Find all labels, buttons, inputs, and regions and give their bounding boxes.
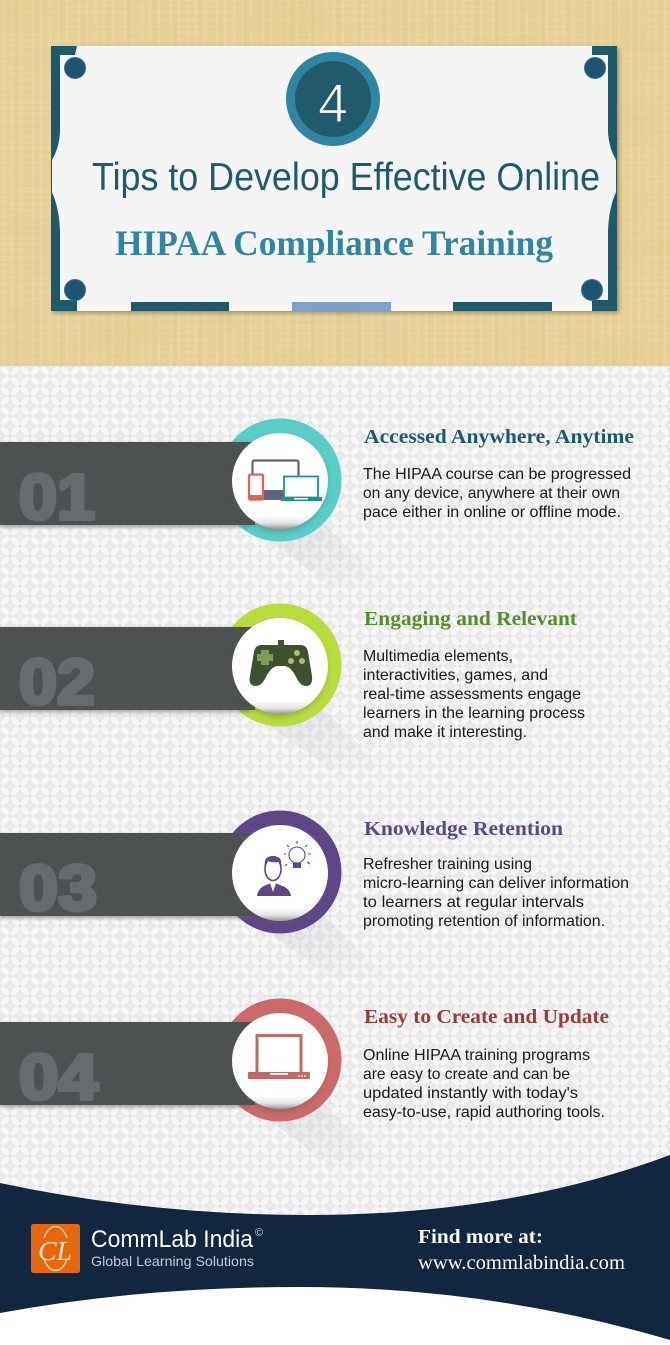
tagline: Global Learning Solutions — [91, 1253, 254, 1269]
card frame — [51, 46, 617, 311]
icon: laptop — [248, 1036, 310, 1079]
card shadow — [53, 48, 619, 313]
website: www.commlabindia.com — [418, 1252, 625, 1274]
tip 2 graphic — [0, 604, 385, 770]
tip 2 body: interactivities, games, and — [363, 667, 548, 684]
tip 3 graphic — [0, 810, 385, 977]
find more label: Find more at: — [418, 1226, 543, 1248]
number badge — [286, 52, 380, 146]
tip 3 body: promoting retention of information. — [363, 913, 605, 930]
copyright mark: © — [255, 1227, 263, 1239]
tip 4 body: are easy to create and can be — [363, 1066, 570, 1083]
number 01: 01 — [19, 461, 95, 533]
tip 2 body — [363, 648, 585, 741]
tip 3 heading: Knowledge Retention — [364, 818, 563, 840]
title card — [51, 46, 619, 313]
tip 1 heading: Accessed Anywhere, Anytime — [364, 426, 634, 448]
title line 2: HIPAA Compliance Training — [115, 223, 553, 263]
number 03: 03 — [19, 852, 97, 924]
tip 2 body: real-time assessments engage — [363, 686, 581, 703]
footer curved shape — [0, 1155, 670, 1345]
tip 3 body: Refresher training using — [363, 856, 532, 873]
background: grey scale-patterned body — [0, 366, 670, 1226]
tip 1 body — [363, 466, 631, 521]
tip 3 body: to learners at regular intervals — [363, 894, 584, 911]
corner dots — [64, 58, 606, 300]
tip 4 body: updated instantly with today's — [363, 1085, 578, 1102]
number 02: 02 — [19, 646, 95, 718]
tip 4 body — [363, 1047, 605, 1121]
tip 3 body — [363, 856, 629, 930]
background: woven tan header band — [0, 0, 670, 366]
tip 4 heading: Easy to Create and Update — [364, 1006, 609, 1028]
card white panel — [52, 46, 616, 311]
tip 1 body: on any device, anywhere at their own — [363, 485, 620, 502]
tip 1 body: The HIPAA course can be progressed — [363, 466, 631, 483]
title line 1: Tips to Develop Effective Online — [92, 156, 600, 199]
logo — [31, 1224, 80, 1273]
footer band — [0, 1155, 670, 1345]
bottom bars — [131, 302, 552, 311]
icon: game controller — [250, 640, 312, 686]
tip 2 body: learners in the learning process — [363, 705, 585, 722]
tip 4 graphic — [0, 998, 385, 1165]
tip 3 body: micro-learning can deliver information — [363, 875, 629, 892]
tip 1 body: pace either in online or offline mode. — [363, 504, 621, 521]
number 04: 04 — [19, 1041, 98, 1113]
tip 2 body: and make it interesting. — [363, 724, 527, 741]
tip 1 graphic — [0, 418, 385, 585]
footer white cut-out — [0, 1287, 670, 1345]
tip 4 body: easy-to-use, rapid authoring tools. — [363, 1104, 605, 1121]
tip 2 body: Multimedia elements, — [363, 648, 513, 665]
icon: person with light bulb — [257, 841, 311, 896]
brand name: CommLab India — [91, 1226, 254, 1253]
logo: CL — [38, 1236, 72, 1266]
tip 4 body: Online HIPAA training programs — [363, 1047, 590, 1064]
icon: devices — [249, 460, 322, 501]
number badge: 4 — [318, 72, 348, 134]
tip 2 heading: Engaging and Relevant — [364, 608, 577, 630]
